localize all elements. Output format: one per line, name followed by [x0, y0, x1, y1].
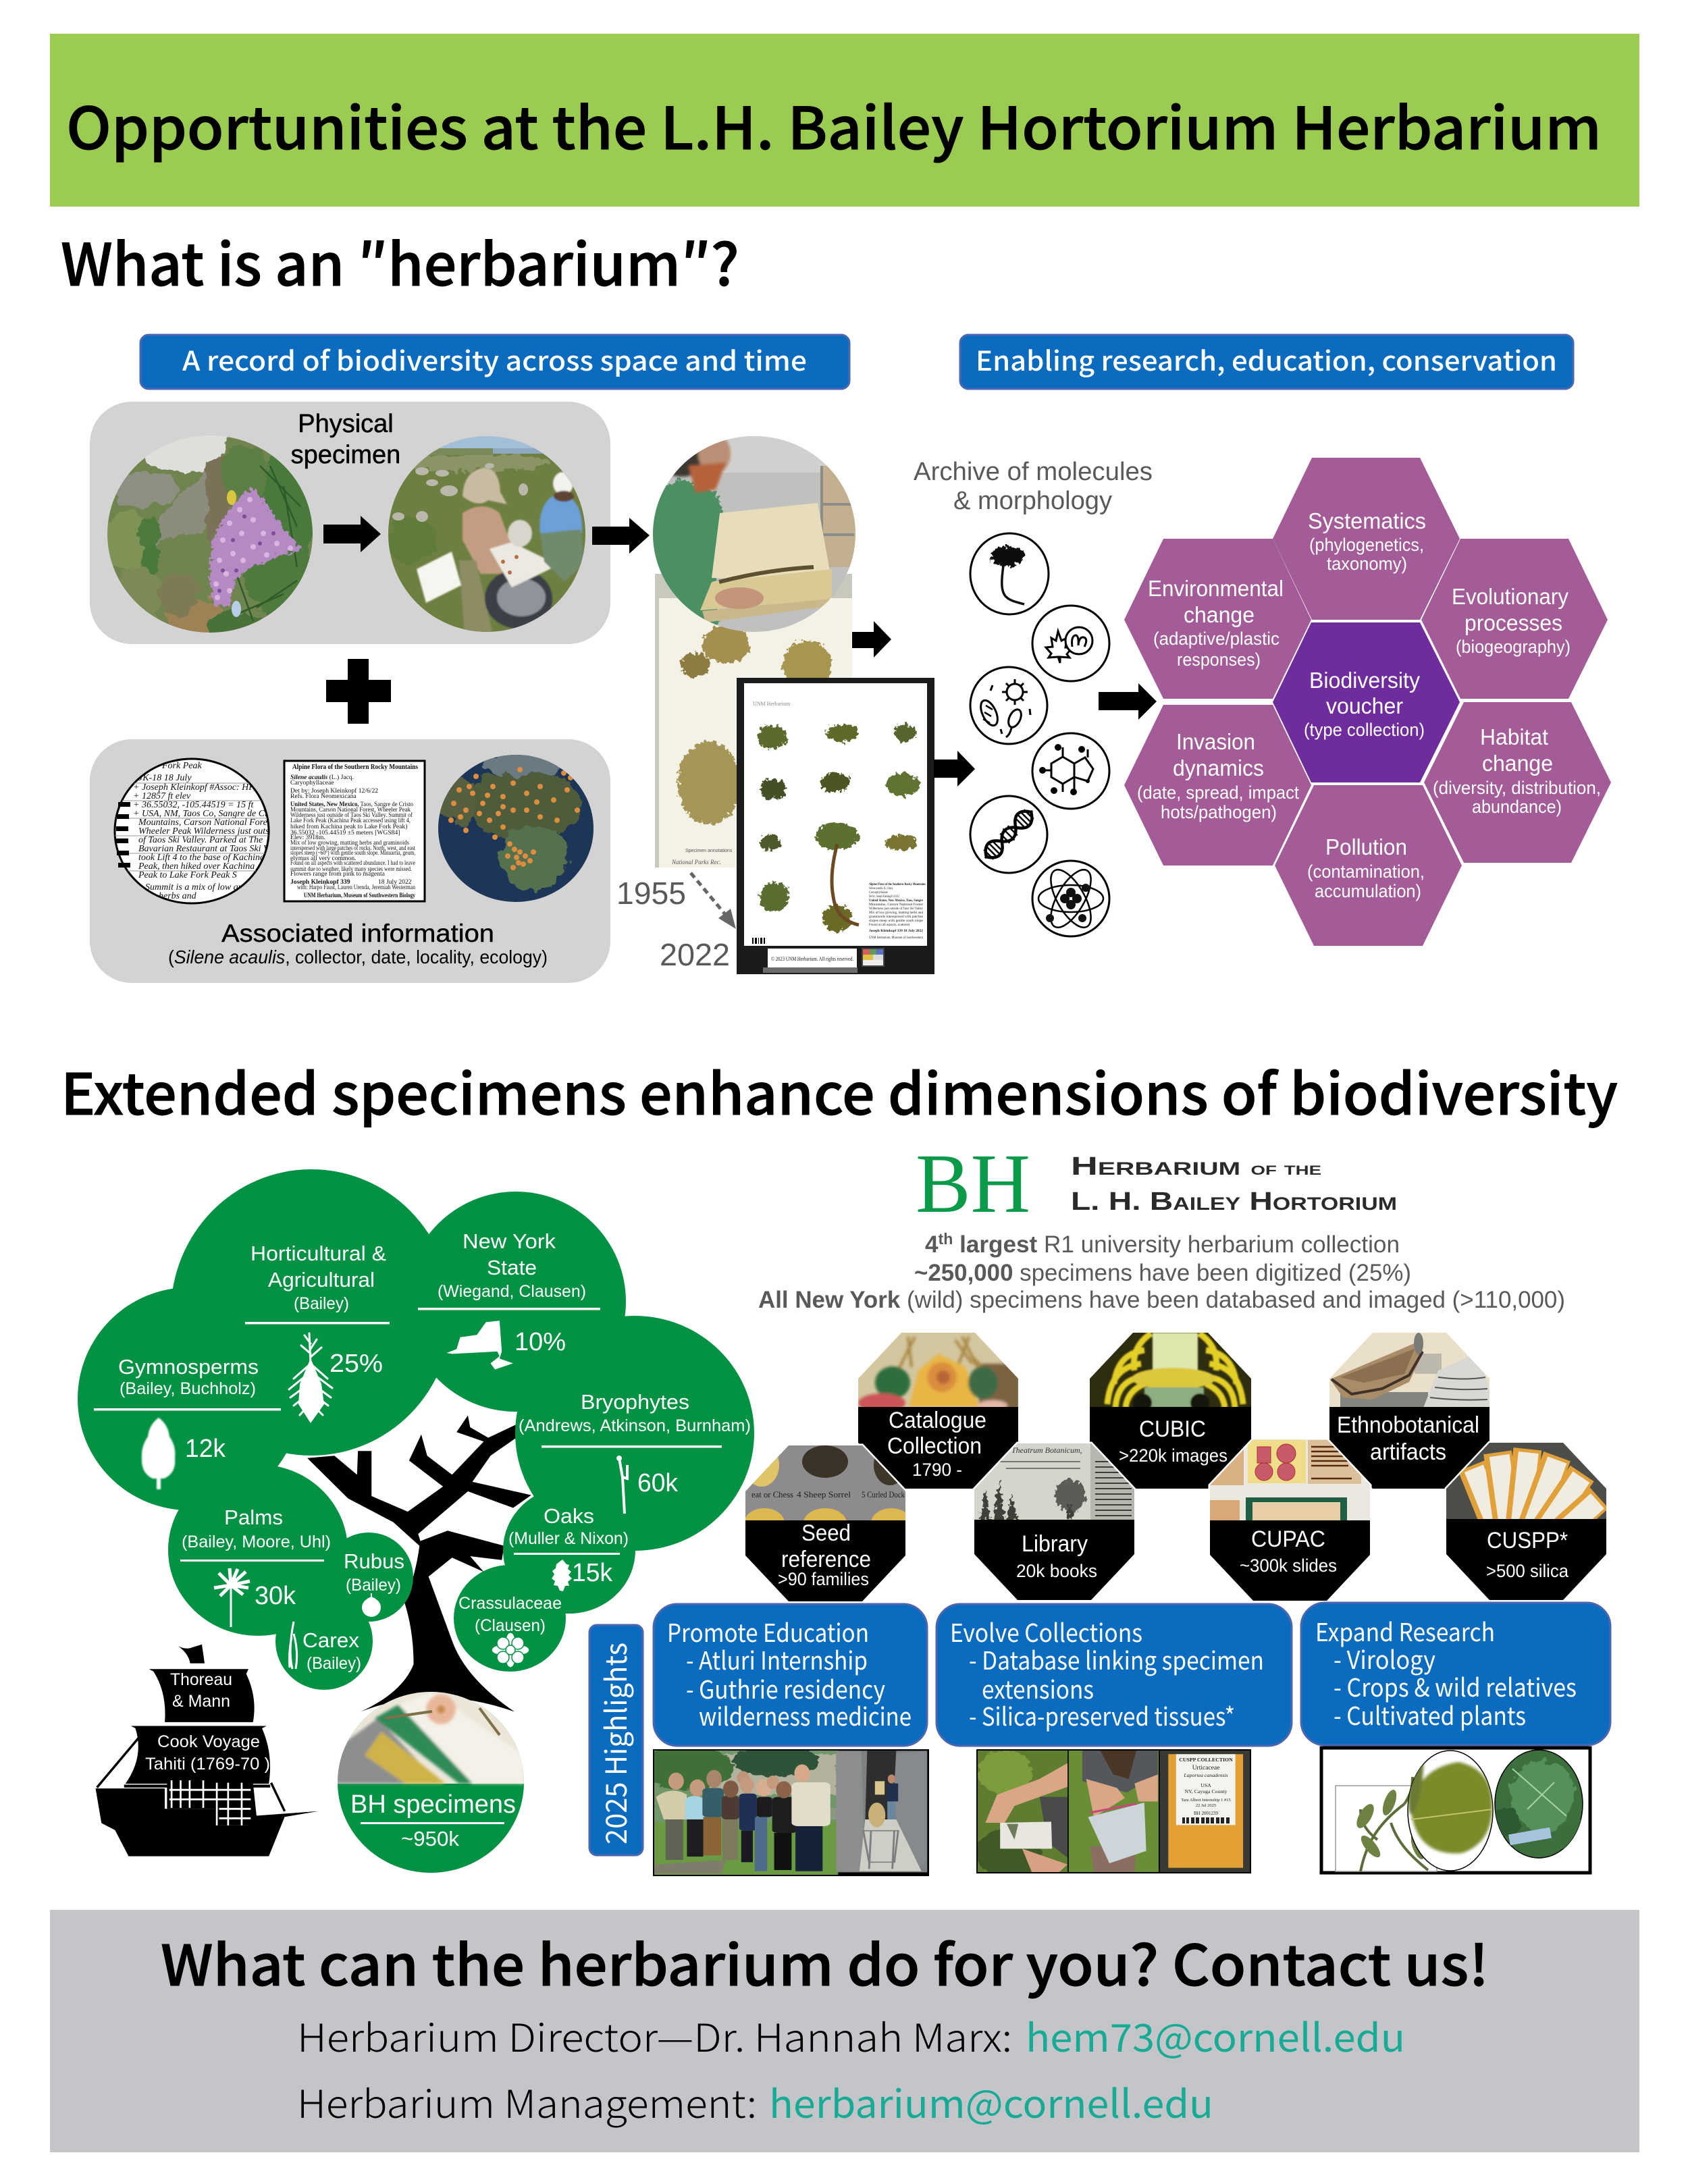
- label: BH specimens: BH specimens: [350, 1790, 516, 1819]
- node: bryophytes: (Andrews, Atkinson, Burnham): [519, 1416, 751, 1435]
- hexagon: environmental change: responses): [1177, 649, 1261, 670]
- archive of molecules label: Archive of molecules: [914, 458, 1153, 486]
- 2022 digitized specimen sheet: Joseph Kleinkopf 339 18 July 2022: [869, 930, 924, 933]
- box: evolve collections: Evolve Collections: [950, 1613, 1142, 1649]
- banner: enabling research: [960, 335, 1573, 389]
- 2022 digitized specimen sheet: UNM Herbarium: [753, 701, 791, 707]
- hexagon: systematics: Systematics: [1308, 508, 1426, 533]
- collection statistics: R1 university herbarium collection: [1044, 1231, 1398, 1258]
- octagon: CUSPP: >500 silica: [1486, 1561, 1569, 1581]
- field notebook: + USA, NM, Taos Co, Sangre de Cristo: [133, 809, 282, 819]
- box: promote education: - Atluri Internship: [686, 1641, 868, 1677]
- hexagon: environmental change: [1124, 539, 1311, 699]
- octagon: seed reference: Seed: [801, 1520, 851, 1546]
- BH logo: L. H. Bailey Hortorium: [1071, 1188, 1397, 1216]
- 2022 digitized specimen sheet: Det by: Joseph Kleinkopf 12/6/22: [869, 895, 899, 899]
- management contact: [297, 2074, 1213, 2129]
- node: palms: (Bailey, Moore, Uhl): [182, 1533, 331, 1551]
- node: horticultural and agricultural: Horticultural &: [250, 1242, 386, 1265]
- octagon: ethnobotanical artifacts: [1329, 1333, 1489, 1491]
- specimen label: hiked from Kachina peak to Lake Fork Peak): [290, 823, 407, 830]
- 2022 digitized specimen sheet: Alpine Flora of the Southern Rocky Mountains: [869, 883, 926, 886]
- 2022 digitized specimen sheet: © 2023 UNM Herbarium. All rights reserved.: [771, 955, 853, 962]
- 2022 digitized specimen sheet: Mountains, Carson National Forest: [869, 903, 924, 907]
- photo: person with specimen folder: [648, 431, 864, 635]
- hexagon: evolutionary processes: Evolutionary: [1452, 584, 1568, 609]
- title banner: [50, 34, 1639, 207]
- octagon: library: 20k books: [1016, 1561, 1097, 1581]
- hexagon: evolutionary processes: [1421, 539, 1608, 699]
- photo: silica tissue sampling and label: USA: [1201, 1782, 1211, 1788]
- specimen label: UNM Herbarium, Museum of Southwestern Biology: [304, 892, 415, 899]
- 1955 specimen sheet: National Parks Rec.: [671, 859, 721, 865]
- specimen label: Refs. Flora Neomexicana: [290, 793, 357, 800]
- management contact: herbarium@cornell.edu: [769, 2074, 1213, 2129]
- photo: collectors in field: [388, 436, 585, 632]
- 2022 digitized specimen sheet: graminoids interspersed with patches: [869, 915, 923, 919]
- dashed arrow: [691, 873, 736, 929]
- box: promote education: - Guthrie residency: [686, 1670, 885, 1706]
- hexagon: biodiversity voucher: Biodiversity: [1309, 668, 1420, 693]
- photo: pressed flower specimen: [336, 1688, 525, 1784]
- box: promote education: Promote Education: [667, 1613, 869, 1649]
- hexagon: pollution: [1275, 785, 1462, 946]
- contact footer: [50, 1910, 1639, 2152]
- collection statistics: 4: [925, 1230, 1038, 1258]
- field notebook: Mountains, Carson National Forest,: [138, 818, 276, 828]
- octagon: ethnobotanical artifacts: Ethnobotanical: [1337, 1412, 1479, 1438]
- archive of molecules label: [914, 458, 1153, 515]
- node: palms: [180, 1506, 331, 1627]
- hexagon: environmental change: (adaptive/plastic: [1153, 629, 1280, 649]
- photo: silica tissue sampling and label: Tara Albert Internship 1 #15: [1181, 1798, 1231, 1803]
- hexagon: biodiversity voucher: (type collection): [1304, 720, 1425, 740]
- 2022 digitized specimen sheet: United States, New Mexico, Taos, Sangre: [869, 899, 924, 903]
- node: crassulaceae: [458, 1594, 562, 1668]
- box: evolve collections: - Silica-preserved tissues*: [969, 1697, 1235, 1733]
- specimen label: [284, 761, 425, 901]
- node: carex: [289, 1622, 361, 1673]
- 2022 digitized specimen sheet: UNM Herbarium, Museum of Southwestern: [869, 936, 923, 940]
- tree of collections: [78, 1169, 754, 1711]
- ship: Thoreau and Cook voyage: Thoreau: [170, 1670, 232, 1689]
- icons: archive of molecules: [970, 533, 1109, 936]
- field notebook: + 36.55032, -105.44519 = 15 ft: [133, 800, 254, 810]
- count: 950k: ~950k: [401, 1827, 460, 1850]
- photo: silica tissue sampling and label: Laportea canadensis: [1183, 1772, 1228, 1778]
- field notebook: Summit is a mix of low grow: [145, 882, 253, 893]
- heading: what is an herbarium: What is an ″herbarium″?: [61, 218, 739, 302]
- node: crassulaceae: Crassulaceae: [458, 1594, 562, 1613]
- photo: silica tissue sampling and label: Urticaceae: [1192, 1765, 1219, 1772]
- box: evolve collections: extensions: [982, 1670, 1094, 1706]
- hexagon: invasion dynamics: (date, spread, impact: [1137, 782, 1299, 803]
- associated information label: [168, 920, 548, 967]
- node: bryophytes: Bryophytes: [581, 1390, 689, 1414]
- specimen label: Silene acaulis (L.) Jacq.: [290, 774, 354, 781]
- box: evolve collections: [937, 1604, 1292, 1746]
- octagon: catalogue collection: Collection: [887, 1433, 982, 1459]
- 2022 digitized specimen sheet: Mix of low growing, matting herbs and: [869, 911, 923, 915]
- director contact: hem73@cornell.edu: [1026, 2008, 1405, 2063]
- box: promote education: [654, 1604, 927, 1746]
- specimen label: 18 July 2022: [378, 878, 412, 886]
- octagon: CUPAC: [1210, 1439, 1370, 1605]
- hexagon: invasion dynamics: [1124, 705, 1311, 865]
- contact heading: What can the herbarium do for you? Contact us!: [161, 1921, 1489, 2002]
- photo: silica tissue sampling and label: BH 2001239: [1194, 1811, 1218, 1816]
- hexagon: habitat change: change: [1482, 751, 1553, 776]
- node: New York State: (Wiegand, Clausen): [438, 1282, 586, 1301]
- node: carex: (Bailey): [307, 1654, 361, 1673]
- ship: Thoreau and Cook voyage: Tahiti (1769-70 ): [145, 1755, 270, 1774]
- specimen label: interspersed with large patches of rocks. North, west, and east: [290, 845, 415, 852]
- field notebook: of Taos Ski Valley. Parked at The: [138, 835, 263, 845]
- 1955 specimen sheet: Specimen annotations: [685, 849, 733, 853]
- octagon: CUSPP: CUSPP*: [1487, 1528, 1568, 1553]
- plus sign: [326, 659, 391, 724]
- photo: pink alpine flowers: [107, 435, 313, 633]
- box: expand research: [1301, 1603, 1610, 1745]
- 2022 digitized specimen sheet: Wilderness just outside of Taos Ski Valley: [869, 907, 923, 911]
- node: oaks: 15k: [572, 1559, 613, 1587]
- photo: internship group and herbarium cabinets: [641, 1745, 929, 1878]
- BH logo: Herbarium of the: [1071, 1152, 1321, 1181]
- node: horticultural and agricultural: (Bailey): [294, 1294, 349, 1313]
- specimen label: elymus all very common.: [290, 855, 357, 862]
- node: gymnosperms: Gymnosperms: [118, 1355, 259, 1379]
- photo: silica tissue sampling and label: 22 Jul 2025: [1196, 1803, 1216, 1808]
- icon: atom: [1032, 861, 1109, 936]
- specimen label: Joseph Kleinkopf 339: [290, 878, 350, 886]
- ship: Thoreau and Cook voyage: Cook Voyage: [157, 1732, 260, 1751]
- specimen label: summit due to weather, likely many species were missed.: [290, 865, 412, 873]
- octagon: CUPAC: ~300k slides: [1240, 1555, 1337, 1576]
- field notebook: Wheeler Peak Wilderness just outside: [138, 826, 281, 836]
- specimen label: Alpine Flora of the Southern Rocky Mountains: [292, 764, 418, 771]
- archive of molecules label: & morphology: [953, 487, 1112, 515]
- octagon: CUBIC: CUBIC: [1139, 1416, 1206, 1442]
- BH specimens circle: [336, 1688, 525, 1873]
- field notebook: + 12857 ft elev: [133, 791, 191, 801]
- 2022 digitized specimen sheet: Silene acaulis (L.) Jacq.: [869, 887, 893, 890]
- node: oaks: [508, 1504, 629, 1591]
- 2022 digitized specimen sheet: slopes steep with gentle south slope: [869, 920, 924, 923]
- octagon: seed reference: eat or Chess: [751, 1489, 793, 1499]
- hexagon: environmental change: Environmental: [1148, 576, 1284, 601]
- octagon: library: Library: [1022, 1531, 1088, 1557]
- arrow: [852, 621, 891, 658]
- specimen label: Caryophyllaceae: [290, 779, 334, 787]
- collection statistics: [758, 1230, 1565, 1313]
- field notebook: Peak, then hiked over Kachina: [138, 861, 255, 872]
- field notebook: herbs and: [159, 891, 197, 901]
- icon: leaf and spores: [1032, 606, 1109, 681]
- hexagon: biodiversity voucher: voucher: [1326, 693, 1403, 718]
- field notebook: Peak to Lake Fork Peak S: [138, 870, 237, 880]
- director contact: [297, 2008, 1405, 2063]
- octagon: ethnobotanical artifacts: artifacts: [1370, 1439, 1446, 1465]
- icon: DNA: [970, 796, 1047, 873]
- hexagon: habitat change: Habitat: [1480, 724, 1548, 749]
- hexagon diagram: biodiversity voucher: [1124, 458, 1611, 946]
- node: New York State: [418, 1229, 600, 1370]
- photo: silica tissue sampling and label: [976, 1749, 1252, 1878]
- collection statistics: All New York (wild) specimens have been databased and imaged (>110,000): [758, 1287, 1565, 1313]
- physical specimen label: Physical: [298, 410, 394, 438]
- node: horticultural and agricultural: 25%: [329, 1350, 383, 1378]
- year 2022: 2022: [660, 937, 730, 972]
- octagon: catalogue collection: Catalogue: [889, 1408, 986, 1433]
- field notebook: took Lift 4 to the base of Kachina: [138, 853, 265, 863]
- node: horticultural and agricultural: [245, 1242, 390, 1423]
- octagon: seed reference: 5 Curled Dock: [862, 1489, 905, 1499]
- box: promote education: wilderness medicine: [699, 1697, 912, 1733]
- octagon: library: [974, 1443, 1134, 1604]
- specimen label: Flowers range from pink to magenta: [290, 870, 386, 878]
- hexagon: habitat change: (diversity, distribution,: [1433, 778, 1601, 798]
- ship: Thoreau and Cook voyage: [96, 1645, 319, 1856]
- field notebook: JK-18 18 July: [138, 773, 192, 783]
- node: crassulaceae: (Clausen): [475, 1616, 546, 1635]
- hexagon: evolutionary processes: (biogeography): [1456, 637, 1571, 657]
- hexagon: pollution: (contamination,: [1307, 861, 1425, 882]
- photo: silica tissue sampling and label: CUSPP COLLECTION: [1179, 1757, 1233, 1763]
- arrow: [323, 516, 381, 552]
- octagon: CUPAC: CUPAC: [1251, 1526, 1325, 1552]
- node: oaks: (Muller & Nixon): [508, 1529, 629, 1548]
- 2022 digitized specimen sheet: Found on all aspects, scattered: [869, 924, 909, 927]
- node: gymnosperms: [94, 1355, 281, 1489]
- octagon: library: Theatrum Botanicum,: [1011, 1445, 1082, 1455]
- box: expand research: - Virology: [1334, 1640, 1435, 1676]
- collection statistics: largest: [953, 1231, 1038, 1258]
- box: expand research: Expand Research: [1315, 1612, 1495, 1649]
- banner: record of biodiversity: [140, 335, 849, 389]
- hexagon: evolutionary processes: processes: [1465, 610, 1562, 635]
- hexagon: habitat change: [1424, 702, 1611, 863]
- 2022 digitized specimen sheet: Caryophyllaceae: [869, 891, 889, 895]
- node: horticultural and agricultural: Agricultural: [268, 1268, 375, 1291]
- octagon: CUSPP: [1446, 1443, 1608, 1603]
- hexagon: systematics: [1273, 458, 1460, 620]
- specimen label: Mix of low growing, matting herbs and graminoids: [290, 839, 409, 847]
- octagon: catalogue collection: 1790 -: [912, 1460, 962, 1480]
- hexagon: pollution: Pollution: [1325, 834, 1407, 859]
- collection statistics: th: [939, 1230, 953, 1248]
- collection statistics: ~250,000 specimens have been digitized (25%): [914, 1260, 1411, 1286]
- 2022 digitized specimen sheet: [737, 678, 934, 974]
- hexagon: invasion dynamics: hots/pathogen): [1161, 802, 1277, 822]
- map: occurrence globe: [438, 755, 594, 902]
- arrow: [592, 518, 650, 554]
- arrow to hexagons: [1099, 683, 1157, 720]
- hexagon: habitat change: abundance): [1472, 797, 1562, 817]
- specimen label: Found on all aspects with scattered abundance. I had to leave: [290, 859, 415, 867]
- octagon: CUBIC: >220k images: [1119, 1445, 1228, 1466]
- heading: extended specimens: Extended specimens enhance dimensions of biodiversity: [61, 1050, 1618, 1131]
- node: New York State: State: [487, 1256, 537, 1279]
- octagon: seed reference: >90 families: [778, 1569, 869, 1589]
- node: rubus: Rubus: [344, 1549, 404, 1573]
- collections octagons: [744, 1333, 1608, 1605]
- specimen label: Wilderness just outside of Taos Ski Valley. Summit of: [290, 811, 413, 819]
- node: New York State: 10%: [515, 1328, 566, 1356]
- node: gymnosperms: (Bailey, Buchholz): [120, 1379, 256, 1398]
- title: Opportunities at the L.H. Bailey Hortorium Herbarium: [66, 82, 1602, 166]
- octagon: seed reference: [744, 1443, 912, 1605]
- hexagon: invasion dynamics: dynamics: [1173, 755, 1264, 780]
- hexagon: invasion dynamics: Invasion: [1176, 729, 1255, 754]
- specimen label: 36.55032 -105.44519 ±5 meters [WGS84]: [290, 829, 400, 836]
- node: palms: Palms: [224, 1506, 283, 1529]
- node: palms: 30k: [255, 1582, 296, 1610]
- arrow to archive: [934, 751, 975, 787]
- group of people: [656, 1764, 830, 1871]
- director contact: Herbarium Director—Dr. Hannah Marx:: [297, 2008, 1012, 2063]
- photo: silica tissue sampling and label: NY, Cayuga County: [1185, 1788, 1228, 1794]
- box: evolve collections: - Database linking specimen: [969, 1641, 1264, 1677]
- node: carex: Carex: [302, 1628, 359, 1652]
- octagon: catalogue collection: [858, 1333, 1020, 1491]
- panel: physical specimen: specimen: [291, 441, 400, 469]
- icon: plant specimen: [970, 533, 1049, 614]
- field notebook: [115, 759, 286, 903]
- hexagon: systematics: (phylogenetics,: [1309, 535, 1424, 555]
- specimen label: Mountains, Carson National Forest, Wheeler Peak: [290, 806, 411, 814]
- banner: record of biodiversity: A record of biodiversity across space and time: [182, 340, 807, 379]
- hexagon: pollution: accumulation): [1315, 881, 1421, 901]
- node: rubus: (Bailey): [346, 1576, 401, 1595]
- year 1955: 1955: [616, 876, 686, 911]
- octagon: seed reference: 4 Sheep Sorrel: [797, 1489, 851, 1499]
- tree trunk and branches: [307, 1416, 531, 1711]
- box: expand research: - Crops & wild relatives: [1334, 1668, 1577, 1704]
- specimens over time: [616, 431, 934, 974]
- octagon: seed reference: reference: [781, 1547, 871, 1572]
- side label: 2025 highlights: 2025 Highlights: [594, 1643, 635, 1844]
- specimen label: with: Harpo Faust, Lauren Urenda, Jeremiah Westerman: [297, 884, 415, 891]
- field notebook: Fork Peak: [161, 761, 202, 771]
- canopy blobs: [78, 1169, 754, 1690]
- BH logo: [916, 1138, 1397, 1231]
- box: expand research: - Cultivated plants: [1334, 1696, 1526, 1732]
- banner: enabling research: Enabling research, education, conservation: [976, 340, 1557, 379]
- node: rubus: [344, 1549, 404, 1617]
- field notebook: + Joseph Kleinkopf #Assoc: HF, L: [133, 782, 263, 793]
- hexagon: environmental change: change: [1184, 602, 1255, 627]
- field notebook: Bavarian Restaurant at Taos Ski Villag: [138, 844, 286, 854]
- hexagon: systematics: taxonomy): [1327, 554, 1407, 574]
- node: oaks: Oaks: [544, 1504, 594, 1528]
- associated information label: (Silene acaulis, collector, date, locality, ecology): [168, 947, 548, 967]
- panel: associated information: [90, 739, 610, 983]
- 1955 specimen sheet: [655, 574, 852, 868]
- icon: microbes: [970, 667, 1047, 744]
- BH logo: BH: [916, 1138, 1030, 1231]
- specimen label: United States, New Mexico, Taos, Sangre de Cristo: [290, 801, 413, 808]
- specimen label: Det by: Joseph Kleinkopf 12/6/22: [290, 787, 378, 795]
- icon: molecule: [1032, 733, 1109, 809]
- node: bryophytes: 60k: [637, 1469, 679, 1497]
- octagon: CUBIC: [1090, 1333, 1251, 1491]
- associated information label: Associated information: [221, 920, 494, 947]
- specimen label: slopes steep (~60°) with gentle south slope. Minuartia, geum,: [290, 849, 415, 857]
- node: New York State: New York: [463, 1229, 556, 1253]
- specimen label: Lake Fork Peak (Kachina Peak accessed using lift 4,: [290, 817, 411, 824]
- photo: herbarium leaf virus evidence: [1321, 1748, 1590, 1873]
- management contact: Herbarium Management:: [297, 2074, 757, 2129]
- panel: physical specimen: [88, 402, 650, 648]
- ship: Thoreau and Cook voyage: & Mann: [172, 1692, 230, 1711]
- node: bryophytes: [519, 1390, 751, 1514]
- hexagon: biodiversity voucher: [1273, 622, 1460, 782]
- node: gymnosperms: 12k: [185, 1435, 226, 1463]
- specimen label: Elev: 3918m.: [290, 834, 325, 841]
